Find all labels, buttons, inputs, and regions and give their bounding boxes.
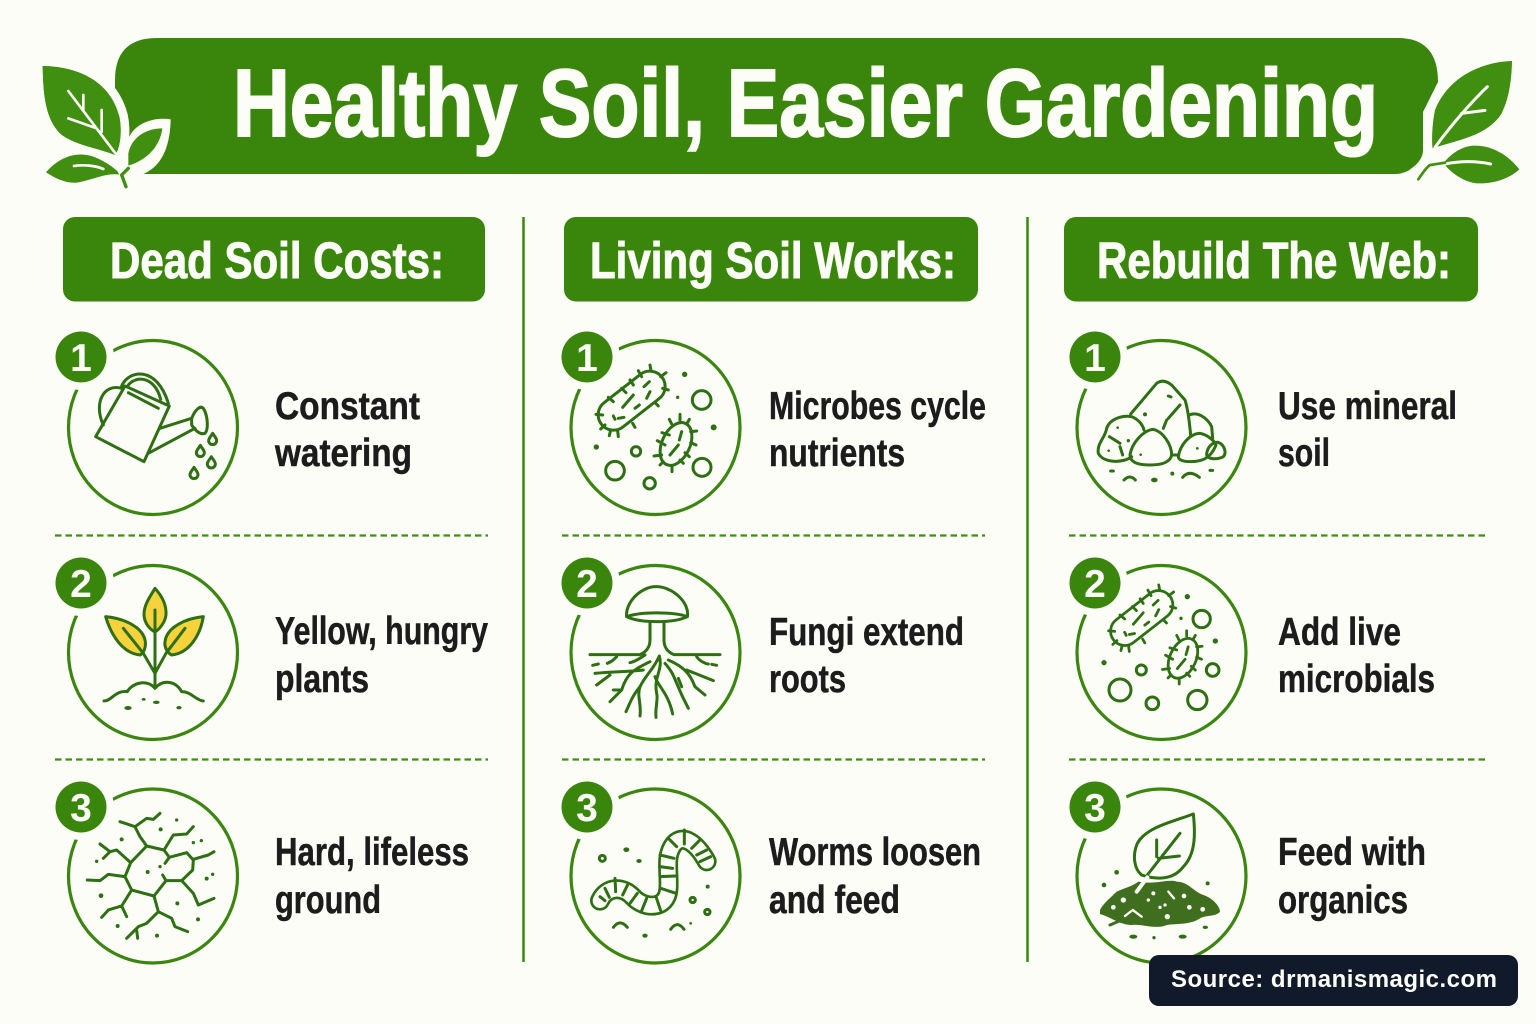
item: constant watering: 1: [70, 337, 92, 380]
label: Microbes cycle nutrients: nutrients: [769, 432, 905, 475]
label: Use mineral soil: soil: [1278, 432, 1330, 475]
icon: cracked soil: [87, 813, 214, 938]
item: live microbials: 2: [1084, 563, 1106, 606]
label: Add live microbials: [1278, 611, 1435, 701]
column divider lines: [524, 217, 1028, 962]
label: Yellow, hungry plants: [275, 610, 488, 701]
item: hard ground: [48, 774, 469, 963]
label: Yellow, hungry plants: plants: [275, 658, 369, 701]
item: hard ground: 3: [70, 787, 92, 830]
item: fungi: [554, 550, 964, 740]
label: Feed with organics: organics: [1278, 879, 1408, 922]
label: Add live microbials: Add live: [1278, 611, 1401, 654]
heading: Dead Soil Costs: Dead Soil Costs:: [110, 232, 444, 289]
item: mineral soil: 1: [1084, 337, 1106, 380]
panel: Rebuild The Web: [1062, 217, 1489, 963]
label: Hard, lifeless ground: [275, 831, 469, 922]
source badge: [1149, 955, 1518, 1006]
label: Hard, lifeless ground: ground: [275, 879, 381, 922]
icon: rocks: [1098, 381, 1225, 482]
icon: earthworm: [599, 830, 711, 938]
label: Worms loosen and feed: and feed: [769, 879, 900, 922]
label: Yellow, hungry plants: Yellow, hungry: [275, 610, 488, 653]
label: Worms loosen and feed: Worms loosen: [769, 831, 981, 874]
item: fungi: 2: [576, 563, 598, 606]
item: microbes: [554, 324, 986, 514]
label: Fungi extend roots: [769, 611, 964, 701]
label: Add live microbials: microbials: [1278, 658, 1435, 701]
title banner: [115, 38, 1438, 174]
label: Use mineral soil: Use mineral: [1278, 385, 1457, 428]
icon: microbes: [592, 365, 717, 489]
item: constant watering: [48, 324, 420, 514]
label: Worms loosen and feed: [769, 831, 981, 922]
icon: leaf on compost: [1100, 814, 1220, 939]
heading: Living Soil Works: Living Soil Works:: [590, 232, 956, 289]
source badge: Source: drmanismagic.com: [1171, 966, 1497, 993]
item: organics: [1062, 774, 1426, 963]
icon: mushroom and roots: [590, 587, 720, 717]
label: Constant watering: [274, 385, 420, 475]
icon: live microbes: [1101, 585, 1219, 710]
label: Microbes cycle nutrients: [769, 385, 986, 475]
item: microbes: 1: [576, 337, 598, 380]
label: Use mineral soil: [1278, 385, 1457, 475]
item: worms: [554, 774, 981, 963]
label: Constant watering: watering: [274, 432, 412, 475]
icon: watering can: [96, 374, 217, 479]
heading: Living Soil Works: [564, 217, 978, 302]
label: Microbes cycle nutrients: Microbes cycle: [769, 385, 986, 428]
label: Fungi extend roots: roots: [769, 658, 846, 701]
icon: left leaves: [43, 66, 171, 187]
item: yellow plants: [48, 550, 488, 740]
heading: Rebuild The Web: [1064, 217, 1478, 302]
label: Feed with organics: [1278, 831, 1426, 922]
item: worms: 3: [576, 787, 598, 830]
panel: Dead Soil Costs: [48, 217, 488, 963]
label: Hard, lifeless ground: Hard, lifeless: [275, 831, 469, 874]
item: mineral soil: [1062, 324, 1457, 514]
icon: right leaves: [1418, 61, 1519, 183]
heading: Rebuild The Web: Rebuild The Web:: [1097, 232, 1451, 289]
label: Constant watering: Constant: [275, 385, 420, 428]
item: live microbials: [1062, 550, 1435, 740]
icon: yellow seedling: [104, 588, 203, 710]
item: organics: 3: [1084, 787, 1106, 830]
panel: Living Soil Works: [554, 217, 986, 963]
label: Feed with organics: Feed with: [1278, 831, 1426, 874]
item: yellow plants: 2: [70, 563, 92, 606]
label: Fungi extend roots: Fungi extend: [769, 611, 964, 654]
heading: Dead Soil Costs: [63, 217, 485, 302]
